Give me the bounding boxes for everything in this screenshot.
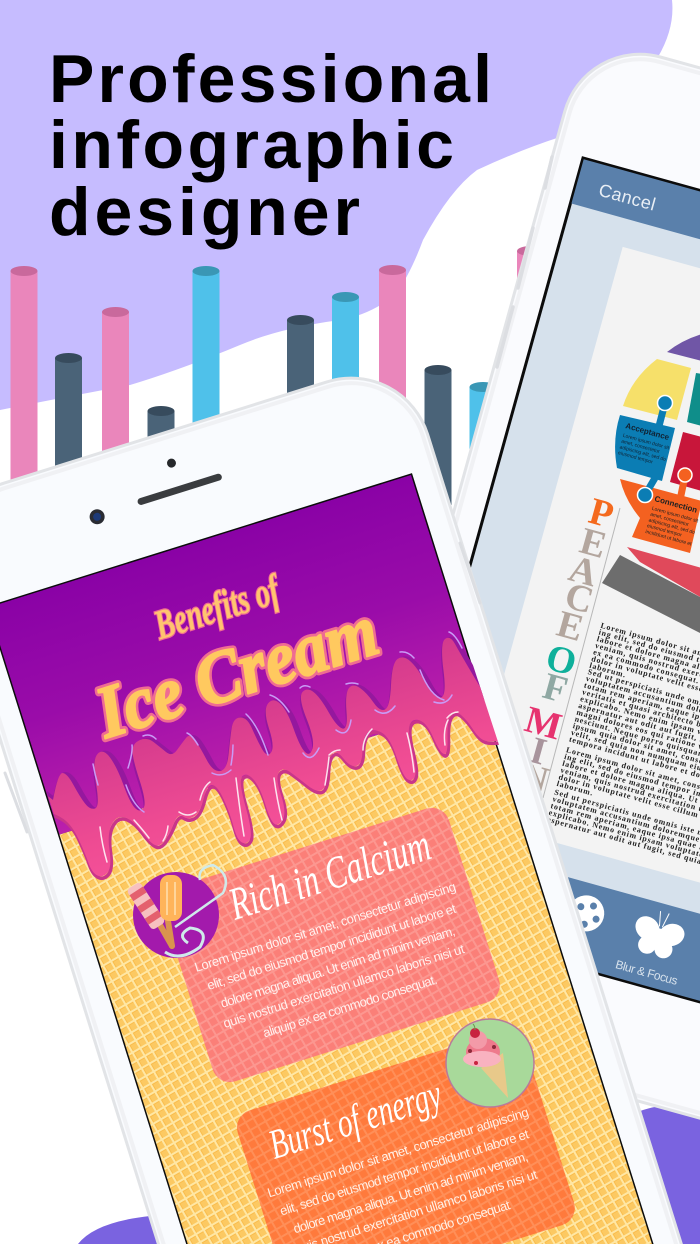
panel body text: Lorem ipsum dolor sit amet, consectetur adipiscing — [265, 1104, 530, 1200]
bottom toolbar — [375, 830, 700, 1125]
puzzle knobs — [638, 396, 692, 502]
divider line — [543, 508, 620, 798]
panel body text — [193, 879, 483, 1054]
body text columns — [546, 621, 700, 874]
puzzle infographic: incididunt ut labore et — [645, 529, 693, 548]
bar 10 — [470, 382, 496, 517]
panel body text: elit, sed do eiusmod tempor incididunt ut labore et — [278, 1126, 531, 1218]
puzzle labels: Lorem ipsum dolor sit — [622, 433, 670, 452]
panel body text: Lorem ipsum dolor sit amet, consectetur adipiscing — [193, 879, 458, 975]
puzzle labels — [617, 421, 674, 469]
panel title: Burst of energy — [264, 1072, 447, 1169]
top nav bar — [571, 159, 700, 417]
vertical heading: peace of mind: C — [560, 575, 598, 622]
front phone side buttons — [5, 543, 480, 832]
screen content — [71, 537, 579, 1244]
teal piece — [687, 373, 700, 426]
puzzle infographic: Connection — [653, 494, 698, 515]
vertical heading: peace of mind: A — [564, 548, 603, 595]
puzzle labels: Acceptance — [624, 421, 671, 442]
screen border — [0, 475, 700, 1244]
front phone — [0, 358, 700, 1244]
icon: ice cream cone — [446, 1019, 534, 1107]
bar chart: cylinders — [10, 246, 544, 571]
red piece — [670, 432, 700, 491]
bar 7 — [332, 292, 359, 407]
lower rim — [54, 680, 499, 880]
sensor dot — [166, 457, 177, 469]
blue piece: acceptance — [615, 415, 675, 481]
panel body text: dolore magna aliqua. Ut enim ad minim veniam, — [291, 1149, 530, 1236]
screen background: purple — [0, 475, 482, 835]
front phone frame — [0, 358, 700, 1244]
bar 5 — [192, 266, 220, 451]
heading: ice cream: Ice Cream — [85, 590, 388, 755]
document page — [464, 247, 700, 951]
title: designer — [49, 174, 360, 250]
bar 11 — [517, 246, 544, 301]
cancel label: Cancel — [597, 180, 658, 215]
puzzle infographic — [515, 334, 700, 802]
icon: palette — [564, 891, 608, 935]
bar 9 — [424, 365, 452, 505]
camera — [88, 507, 107, 526]
puzzle infographic: amet, consectetur — [649, 512, 690, 528]
lavender highlights — [93, 632, 462, 812]
back phone screen — [374, 158, 700, 1125]
blob: purple bottom left — [78, 1216, 210, 1244]
back phone — [315, 36, 700, 1234]
heading: benefits of: Benefits of — [148, 566, 287, 649]
title: infographic — [49, 107, 454, 183]
bar 6 — [287, 315, 314, 420]
vertical heading: peace of mind: O — [541, 636, 581, 685]
panel body text: aliquip ex ea commodo consequat. — [261, 972, 439, 1040]
panel body text: elit, sed do eiusmod tempor incididunt ut labore et — [205, 901, 458, 993]
back phone side buttons — [497, 157, 552, 367]
bar 1 — [10, 266, 38, 571]
bar 3 — [102, 307, 129, 512]
ice cream drip — [40, 632, 511, 878]
vertical heading: peace of mind: I — [525, 729, 551, 774]
vertical heading: peace of mind: F — [538, 665, 572, 712]
puzzle infographic: Lorem ipsum dolor sit — [651, 506, 699, 525]
panel title: Rich in Calcium — [222, 819, 436, 930]
puzzle infographic: adipiscing elit, sed do — [648, 517, 696, 536]
title: Professional — [49, 41, 492, 117]
vertical heading: peace of mind: N — [515, 755, 553, 802]
toolbar label: Blur & Focus — [614, 957, 679, 988]
bar 4 — [148, 406, 174, 471]
bar 8 — [379, 265, 406, 410]
puzzle labels: eiusmod tempor — [617, 450, 654, 466]
panel body text: quis nostrud exercitation ullamco laboris nisi ut — [221, 941, 467, 1031]
back phone frame — [315, 36, 700, 1234]
body text columns: laborum. — [589, 661, 627, 680]
blob: lavender top — [0, 0, 672, 410]
panel body text: dolore magna aliqua. Ut enim ad minim veniam, — [219, 923, 457, 1011]
panel: rich in calcium — [157, 803, 504, 1087]
vertical heading: peace of mind: E — [552, 603, 588, 650]
gray band — [602, 555, 700, 634]
purple wedge — [667, 334, 700, 361]
heading: ice cream: Ice Cream — [85, 590, 388, 755]
pink body — [40, 638, 510, 876]
vertical heading: peace of mind: P — [584, 490, 618, 537]
orange piece: connection — [620, 479, 700, 553]
blob: purple bottom right — [600, 1106, 700, 1244]
screen background: waffle — [59, 702, 700, 1244]
puzzle labels: amet, consectetur — [620, 439, 661, 455]
bar 2 — [55, 353, 82, 558]
panel: burst of energy — [232, 1026, 579, 1244]
body text columns: laborum. — [556, 779, 595, 798]
panel body text — [265, 1104, 555, 1244]
title — [49, 41, 492, 250]
upper shadow — [43, 641, 503, 814]
vertical heading: peace of mind: E — [575, 520, 611, 567]
puzzle infographic: eiusmod tempor — [646, 523, 683, 539]
icon: popsicles — [126, 865, 226, 958]
red band — [627, 547, 700, 598]
yellow piece — [623, 359, 691, 420]
icon: butterfly — [625, 905, 693, 964]
vertical heading: peace of mind — [515, 490, 618, 802]
vertical heading: peace of mind: M — [520, 698, 566, 748]
puzzle labels: adipiscing elit, sed do — [619, 444, 667, 463]
white highlights — [100, 712, 458, 862]
speaker — [137, 473, 223, 506]
